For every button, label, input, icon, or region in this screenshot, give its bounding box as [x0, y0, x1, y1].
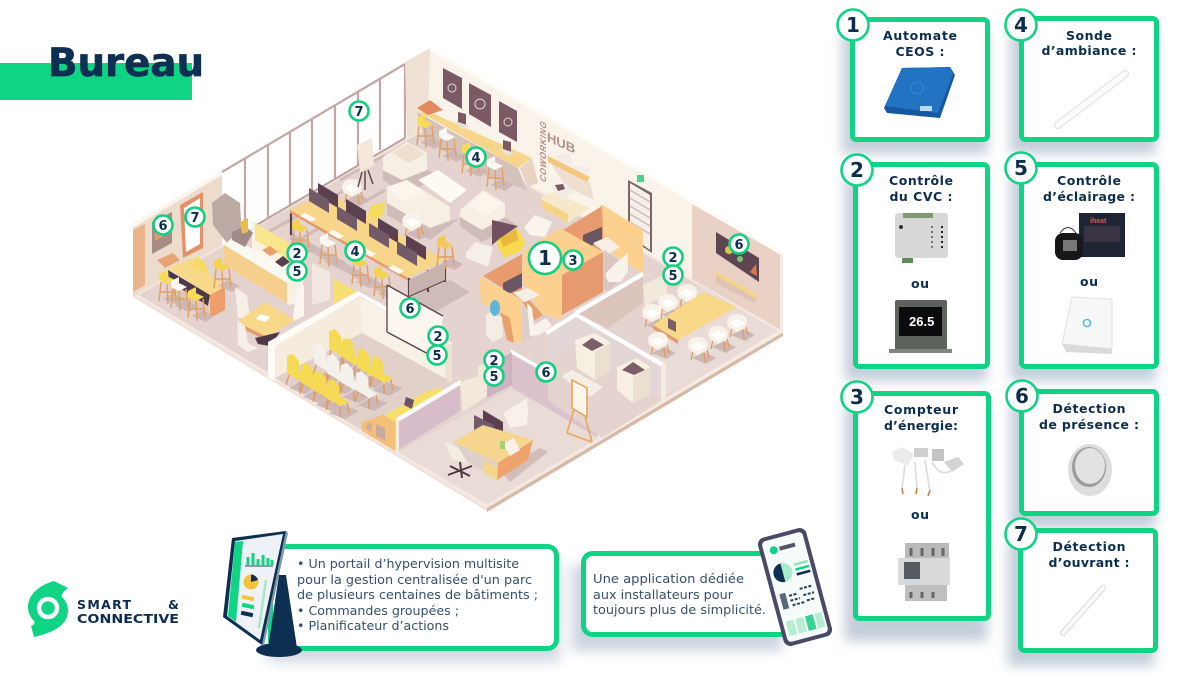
panel: hypervision portal text: • Commandes groupées ; [297, 604, 459, 618]
panel: 3 compteur d'energie: ou [911, 507, 929, 522]
title band: Bureau [48, 41, 204, 86]
meeting table near kitchen [235, 285, 304, 352]
panel: 5 controle d'eclairage: Contrôle [1057, 173, 1121, 188]
lounge sofas and coffee table [383, 142, 515, 242]
icon: blue controller [884, 67, 955, 118]
icon: thermostat [889, 300, 952, 353]
panel: 3 compteur d'energie: 3 [850, 385, 864, 409]
flip chart by the window [357, 138, 374, 190]
panel: 1 automate CEOS: CEOS : [896, 44, 944, 59]
wall shelf with binders [548, 153, 594, 200]
marker 7 kitchen [186, 208, 204, 226]
marker 2 office: 2 [489, 354, 499, 369]
lounge seats [437, 215, 552, 270]
panel: 3 compteur d'energie: Compteur [884, 402, 959, 417]
marker 4 bar [466, 148, 486, 166]
logo: CONNECTIVE [77, 611, 179, 626]
long desk row with monitors [290, 179, 470, 318]
marker 6 kitchen [154, 216, 172, 234]
panel: 4 sonde d'ambiance: Sonde [1066, 28, 1112, 43]
icon: presence sensor [1068, 444, 1112, 496]
icon: HVAC module [895, 213, 948, 263]
panel: 1 automate CEOS [838, 10, 988, 140]
icon: touch switch [1062, 297, 1112, 354]
panel: 5 controle d'eclairage: d’éclairage : [1043, 189, 1135, 204]
marker 7 kitchen: 7 [190, 211, 200, 226]
back right wall [428, 47, 783, 334]
panel: 3 compteur d'energie [842, 382, 988, 618]
card shadows [268, 30, 1156, 666]
marker 2 kitchen: 2 [292, 247, 302, 262]
panel: hypervision portal text [270, 546, 556, 648]
rolling whiteboard [567, 380, 592, 442]
marker 5 right [664, 266, 682, 284]
coworking hub lettering [539, 119, 575, 184]
marker 2 office [484, 350, 504, 370]
icon: smartphone app [756, 526, 834, 648]
left wall and windows [133, 48, 430, 297]
marker 6 kitchen: 6 [158, 219, 168, 234]
coworking hub lettering: HUB [547, 130, 575, 157]
icon: tablet monitor dashboard [223, 531, 302, 657]
panel: 2 controle du CVC: 2 [850, 158, 864, 182]
panel: 7 detection d'ouvrant [1006, 518, 1156, 650]
panel: 5 controle d'eclairage: 5 [1014, 156, 1028, 180]
marker 6 classroom [400, 298, 420, 318]
cubicles [479, 204, 643, 343]
marker 5 office [484, 366, 504, 386]
panel: installer app text [584, 554, 788, 634]
projection screen [387, 285, 443, 357]
side window, poster and break table [133, 192, 240, 322]
panel: 7 detection d'ouvrant: d’ouvrant : [1048, 555, 1130, 570]
icon: lighting module box: iheat [1090, 218, 1107, 225]
logo [28, 581, 179, 637]
marker 5 office: 5 [489, 370, 499, 385]
panel: 1 automate CEOS: Automate [883, 28, 957, 43]
marker 5 right: 5 [668, 269, 678, 284]
panel: 4 sonde d'ambiance: d’ambiance : [1042, 43, 1136, 58]
logo: SMART [77, 597, 131, 612]
copy room [545, 312, 666, 438]
marker 4 desks [346, 242, 364, 260]
marker 1 large: 1 [538, 246, 552, 270]
panel: installer app text: Une application dédiée [593, 572, 744, 586]
panel: 4 sonde d'ambiance: 4 [1014, 13, 1028, 37]
marker 2 classroom [428, 326, 448, 346]
logo: & [168, 597, 179, 612]
icon: clamp meter [892, 447, 964, 496]
back bar counter with stools [417, 100, 538, 191]
marker 4 desks: 4 [350, 245, 360, 260]
marker 6 office [536, 362, 556, 382]
marker 3 [564, 250, 582, 270]
wall screen with charts [715, 232, 759, 303]
marker 6 office: 6 [541, 366, 551, 381]
marker 1 large [529, 242, 561, 274]
marker 2 kitchen [288, 244, 306, 262]
panel: 4 sonde d'ambiance [1006, 10, 1156, 140]
marker 6 meeting [730, 234, 748, 254]
panel: 2 controle du CVC: Contrôle [889, 173, 953, 188]
marker 6 classroom: 6 [405, 302, 415, 317]
panel: hypervision portal text: • Un portail d’hypervision multisite [297, 557, 519, 571]
classroom walls [268, 291, 452, 452]
icon: door sensor [1063, 588, 1103, 633]
panel: 1 automate CEOS: 1 [846, 13, 860, 37]
panel: installer app text: toujours plus de simplicité. [593, 603, 766, 617]
panel: 6 detection de presence: 6 [1015, 384, 1029, 408]
icon: lighting module box [1055, 213, 1125, 260]
marker 3: 3 [568, 254, 578, 269]
panel: hypervision portal text: de plusieurs centaines de bâtiments ; [297, 588, 538, 602]
panel: 7 detection d'ouvrant: Détection [1052, 539, 1126, 554]
executive office desk [445, 398, 548, 482]
numbered markers on the plan [154, 102, 748, 386]
low shelves and podium [362, 387, 442, 451]
isometric office floor plan [133, 47, 783, 512]
marker 5 kitchen: 5 [292, 265, 302, 280]
panel: 3 compteur d'energie: d’énergie: [884, 418, 958, 433]
marker 5 classroom [428, 346, 446, 364]
panel: 5 controle d'eclairage [1006, 152, 1156, 366]
marker 5 kitchen [288, 262, 306, 280]
panel: 5 controle d'eclairage: ou [1080, 274, 1098, 289]
marker 7 window [350, 102, 368, 120]
classroom chairs [286, 329, 403, 419]
panel: 2 controle du CVC [842, 154, 988, 366]
panel: 7 detection d'ouvrant: 7 [1014, 522, 1028, 546]
door with exit sign [628, 175, 652, 253]
marker 4 bar: 4 [471, 151, 481, 166]
panel: 2 controle du CVC: du CVC : [890, 189, 952, 204]
printer cabinet [542, 183, 590, 223]
marker 2 right [664, 248, 682, 266]
panel: hypervision portal text: pour la gestion centralisée d'un parc [297, 573, 532, 587]
doorway behind classroom [312, 263, 357, 305]
panel: installer app text: aux installateurs pour [593, 588, 733, 602]
divider wall and meeting room [575, 268, 755, 364]
coworking hub lettering: COWORKING [539, 119, 548, 184]
floor slab [133, 125, 783, 512]
panel: 6 detection de presence: Détection [1052, 401, 1126, 416]
marker 2 classroom: 2 [433, 330, 443, 345]
panel: 2 controle du CVC: ou [911, 276, 929, 291]
icon: ambient probe [1058, 74, 1125, 125]
kitchen [212, 193, 303, 305]
marker 6 meeting: 6 [734, 238, 744, 253]
marker 2 right: 2 [668, 251, 678, 266]
panel: 6 detection de presence [1006, 380, 1156, 514]
icon: din rail meter [898, 543, 950, 601]
marker 7 window: 7 [354, 105, 364, 120]
wall posters [443, 68, 517, 142]
title band [0, 41, 204, 100]
panel: 6 detection de presence: de présence : [1039, 417, 1139, 432]
panel: hypervision portal text: • Planificateur d’actions [297, 619, 449, 633]
doorway segment and office partition walls [396, 349, 602, 454]
icon: thermostat: 26.5 [909, 314, 934, 329]
marker 5 classroom: 5 [432, 349, 442, 364]
